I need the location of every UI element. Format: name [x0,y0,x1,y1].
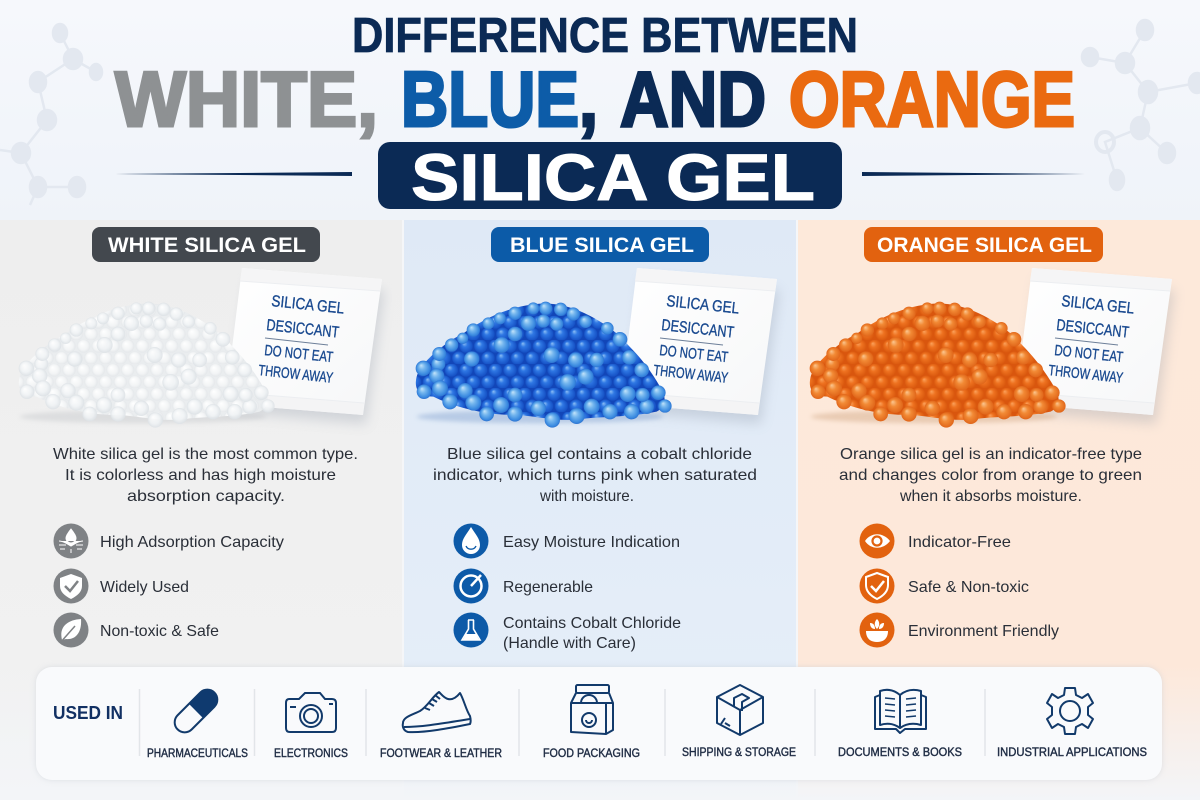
use: food packaging: FOOD PACKAGING [543,748,640,760]
feature: contains cobalt chloride [454,612,681,652]
panel: orange silica gel background [798,220,1200,800]
feature: indicator-free [860,524,1011,558]
heading: orange silica gel [864,227,1103,262]
bead pile: blue [416,302,672,428]
feature: non-toxic and safe: Non-toxic & Safe [100,623,219,640]
sachet: blue panel: DESICCANT [661,317,735,342]
sachet: blue panel: SILICA GEL [666,293,740,318]
heading: white silica gel: WHITE SILICA GEL [108,234,306,257]
use: documents and books: DOCUMENTS & BOOKS [838,747,962,759]
feature: contains cobalt chloride: Contains Cobalt Chloride [503,615,681,632]
sachet: white panel: DO NOT EAT [264,342,334,366]
title line 2: AND [620,55,766,143]
header background [0,0,1200,220]
heading: blue silica gel: BLUE SILICA GEL [510,234,694,257]
sachet: blue panel: DO NOT EAT [659,342,729,366]
heading: white silica gel [92,227,320,262]
use: electronics: ELECTRONICS [274,748,348,760]
description: white: absorption capacity. [127,488,285,505]
feature: widely used [54,568,189,604]
sachet: white panel: SILICA GEL [271,293,345,318]
use: electronics [274,693,348,760]
sachet: blue panel [620,268,779,424]
description: white: White silica gel is the most common type. [53,446,358,463]
feature: environment friendly [860,612,1059,648]
used in bar [36,667,1162,780]
sachet: blue panel: THROW AWAY [653,362,729,387]
feature: regenerable: Regenerable [503,579,593,596]
description: blue: with moisture. [539,488,634,505]
bead pile: orange [810,302,1066,428]
feature: high adsorption capacity: High Adsorption Capacity [100,534,284,551]
sachet: orange panel: DESICCANT [1056,317,1130,342]
heading: orange silica gel: ORANGE SILICA GEL [877,234,1092,257]
use: footwear and leather: FOOTWEAR & LEATHER [380,748,502,760]
use: footwear and leather [380,692,502,760]
feature: easy moisture indication [454,524,680,558]
panel: white silica gel background [0,220,402,800]
title line 2 [115,55,1075,143]
title line 2: , [579,55,598,143]
title line 1: DIFFERENCE BETWEEN [352,9,858,63]
sachet: orange panel: SILICA GEL [1061,293,1135,318]
feature: high adsorption capacity [54,524,284,558]
description: blue: indicator, which turns pink when saturated [433,467,757,484]
panel: blue silica gel [416,227,779,652]
feature: easy moisture indication: Easy Moisture Indication [503,534,680,551]
use: documents and books [838,690,962,759]
feature: safe and non-toxic [860,568,1029,604]
molecule decoration left [0,24,102,205]
use: pharmaceuticals: PHARMACEUTICALS [147,748,248,760]
description: white: It is colorless and has high moisture [65,467,336,484]
feature: regenerable [454,568,593,604]
title banner: silica gel: SILICA GEL [411,140,815,214]
feature: indicator-free: Indicator-Free [908,534,1011,551]
use: shipping and storage: SHIPPING & STORAGE [682,747,796,759]
heading: blue silica gel [491,227,709,262]
bead pile: white [19,302,275,428]
sachet: white panel: THROW AWAY [258,362,334,387]
use: food packaging [543,685,640,760]
title line 2: WHITE, [115,55,378,143]
used in label: USED IN [53,703,123,723]
feature: contains cobalt chloride: (Handle with Care) [503,635,636,652]
feature: environment friendly: Environment Friendly [908,623,1059,640]
feature: non-toxic and safe [54,612,219,648]
use: industrial applications [997,688,1147,759]
description: blue [433,446,757,505]
title [115,9,1075,214]
description: orange [839,446,1142,505]
sachet: white panel: DESICCANT [266,317,340,342]
panel: orange silica gel [810,227,1174,648]
description: orange: and changes color from orange to green [839,467,1142,484]
use: shipping and storage [682,685,796,759]
sachet: orange panel: THROW AWAY [1048,362,1124,387]
use: pharmaceuticals [147,686,248,760]
description: blue: Blue silica gel contains a cobalt chloride [447,446,752,463]
description: orange: when it absorbs moisture. [899,488,1082,505]
sachet: white panel [225,268,384,424]
feature: safe and non-toxic: Safe & Non-toxic [908,579,1029,596]
feature: widely used: Widely Used [100,579,189,596]
description: orange: Orange silica gel is an indicator-free type [840,446,1142,463]
molecule decoration right [1082,20,1200,190]
panel: blue silica gel background [404,220,796,800]
sachet: orange panel: DO NOT EAT [1054,342,1124,366]
use: industrial applications: INDUSTRIAL APPLICATIONS [997,747,1147,759]
title line 2: BLUE [401,55,579,143]
description: white [53,446,358,505]
sachet: orange panel [1015,268,1174,424]
title line 2: ORANGE [789,55,1075,143]
panel: white silica gel [19,227,384,648]
